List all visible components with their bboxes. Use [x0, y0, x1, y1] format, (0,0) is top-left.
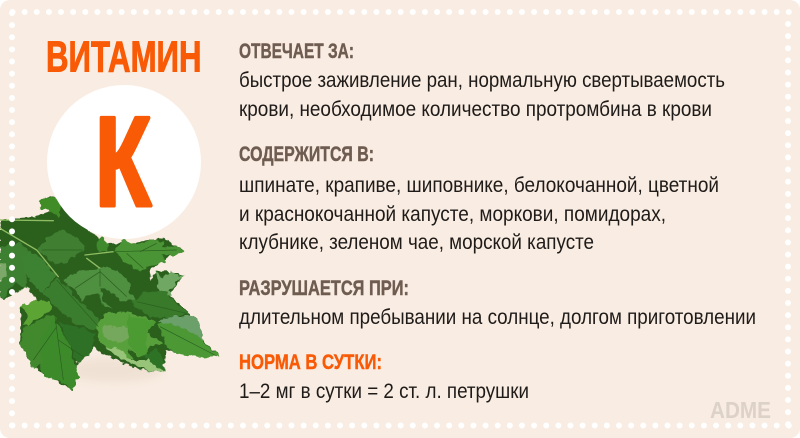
text block: destroyed by: РАЗРУШАЕТСЯ ПРИ: — [239, 276, 409, 300]
white circle with letter — [47, 85, 201, 239]
text block: contained in — [239, 142, 719, 254]
text block: destroyed by — [239, 276, 756, 329]
text block: contained in: клубнике, зеленом чае, морской капусте — [239, 231, 594, 254]
text block: responsible for: быстрое заживление ран, нормальную свертываемость — [239, 69, 725, 92]
text block: daily norm: НОРМА В СУТКИ: — [239, 350, 382, 374]
text block: responsible for: крови, необходимое количество протромбина в крови — [239, 98, 712, 121]
text block: contained in: СОДЕРЖИТСЯ В: — [239, 142, 374, 166]
text block: responsible for: ОТВЕЧАЕТ ЗА: — [239, 39, 354, 63]
white circle with letter: К — [95, 90, 151, 232]
text block: responsible for — [239, 39, 725, 121]
text block: daily norm: 1–2 мг в сутки = 2 ст. л. петрушки — [239, 380, 529, 403]
title: ВИТАМИН — [46, 34, 202, 82]
text block: daily norm — [239, 350, 529, 403]
watermark: ADME — [710, 397, 771, 423]
text block: destroyed by: длительном пребывании на солнце, долгом приготовлении — [239, 306, 756, 329]
icon: parsley bunch — [0, 197, 220, 390]
text block: contained in: и краснокочанной капусте, моркови, помидорах, — [239, 203, 666, 226]
text block: contained in: шпинате, крапиве, шиповнике, белокочанной, цветной — [239, 174, 719, 197]
